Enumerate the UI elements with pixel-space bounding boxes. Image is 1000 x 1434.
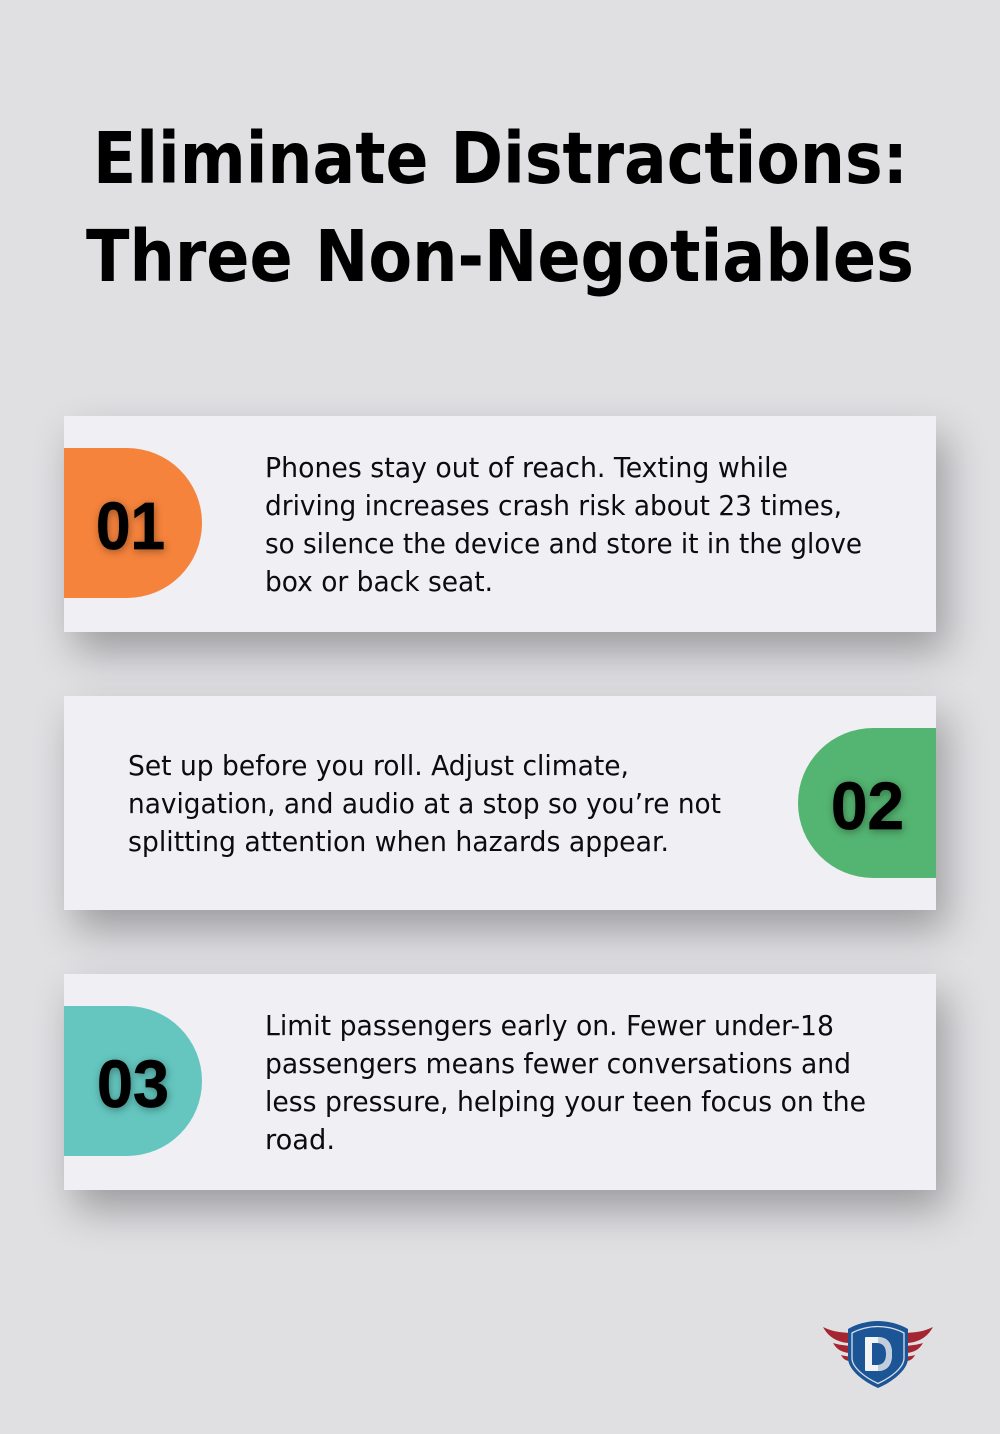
text: set up before you roll: Set up before you roll. Adjust climate, xyxy=(128,750,629,782)
text: limit passengers early on: less pressure, helping your teen focus on the xyxy=(265,1086,866,1118)
text: set up before you roll: navigation, and audio at a stop so you’re not xyxy=(128,788,721,820)
panel: step 03 xyxy=(64,974,936,1190)
badge: 03: 03 xyxy=(97,1047,169,1122)
title xyxy=(86,117,914,298)
text: phones stay out of reach: Phones stay out of reach. Texting while xyxy=(265,452,788,484)
icon: shield logo with wings xyxy=(823,1321,933,1388)
text: limit passengers early on: Limit passengers early on. Fewer under-18 xyxy=(265,1010,834,1042)
text: set up before you roll: splitting attention when hazards appear. xyxy=(128,826,669,858)
badge: 01: 01 xyxy=(96,489,165,564)
badge: 02 xyxy=(798,728,936,878)
title: Eliminate Distractions: xyxy=(93,117,908,200)
badge: 01 xyxy=(64,448,202,598)
panel: step 02 xyxy=(64,696,936,910)
panel: step 01 xyxy=(64,416,936,632)
badge: 02: 02 xyxy=(831,769,904,844)
text: limit passengers early on xyxy=(265,1010,866,1156)
text: limit passengers early on: road. xyxy=(265,1124,335,1156)
text: phones stay out of reach: so silence the device and store it in the glove xyxy=(265,528,862,560)
text: phones stay out of reach: driving increases crash risk about 23 times, xyxy=(265,490,842,522)
text: limit passengers early on: passengers means fewer conversations and xyxy=(265,1048,851,1080)
badge: 03 xyxy=(64,1006,202,1156)
text: set up before you roll xyxy=(128,750,721,858)
text: phones stay out of reach: box or back seat. xyxy=(265,566,493,598)
text: phones stay out of reach xyxy=(265,452,862,598)
title: Three Non-Negotiables xyxy=(86,215,914,298)
